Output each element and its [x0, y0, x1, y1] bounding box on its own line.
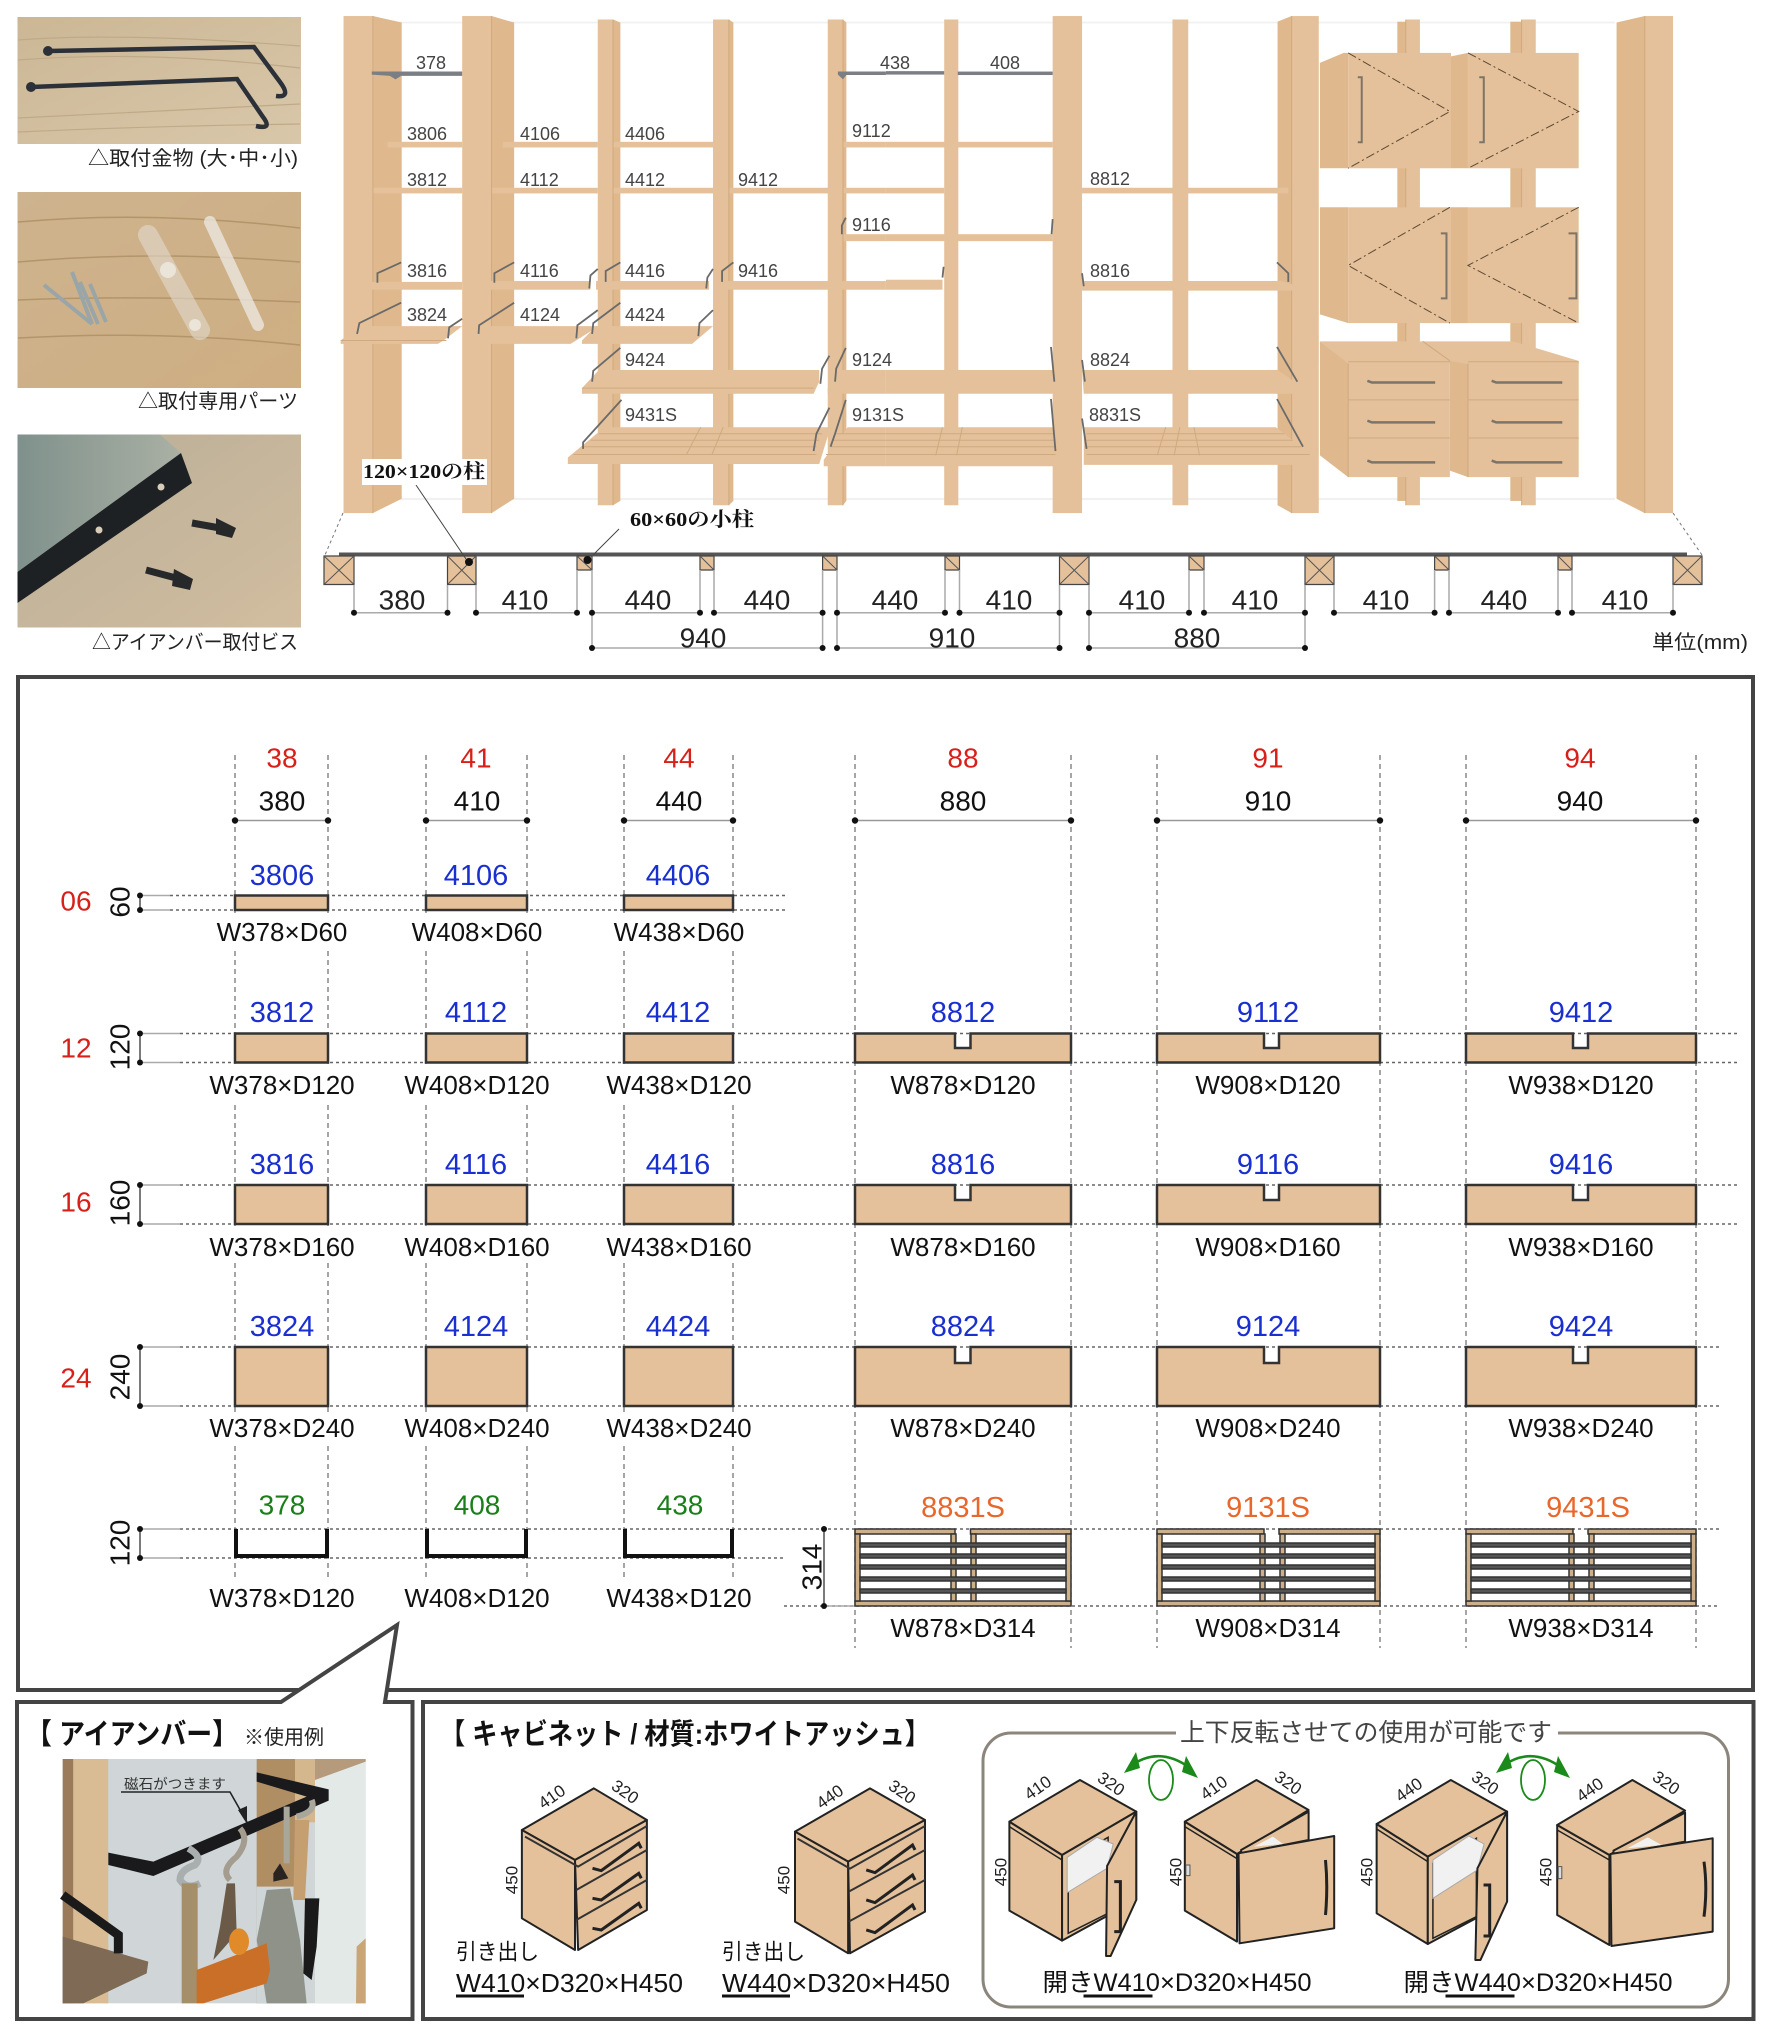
- row: iron bars: 408: [454, 1490, 500, 1520]
- column size headers: 440: [656, 786, 702, 816]
- row: depth 120: W908×D120: [1195, 1070, 1341, 1100]
- column size headers: 410: [454, 786, 500, 816]
- floor plan: rail and posts: [324, 513, 1702, 584]
- drawer caption W410: W410×D320×H450: [456, 1968, 683, 1998]
- hinged cabinet dimensions: 320: [1271, 1767, 1305, 1799]
- post fronts right half: [944, 16, 1673, 513]
- slatted shelf 9431S: 9431S: [1546, 1492, 1630, 1524]
- drawer caption W440: 引き出し: [722, 1940, 805, 1964]
- column size headers: 880: [940, 786, 986, 816]
- shelf code labels: 4412: [625, 170, 665, 190]
- hinged cabinet dimensions: 410: [1197, 1772, 1231, 1804]
- shelf code labels: 9412: [738, 170, 778, 190]
- caption: screws: △アイアンバー取付ビス: [92, 631, 298, 654]
- shelf code labels: 9116: [852, 215, 891, 235]
- shelf elevation: left half: [341, 16, 886, 513]
- shelf code labels: [407, 53, 1141, 425]
- row: depth 160: W908×D160: [1195, 1232, 1341, 1262]
- row: depth 120: 3812: [250, 997, 314, 1029]
- column size headers: 94: [1564, 742, 1596, 774]
- row: depth 60: W408×D60: [412, 917, 542, 947]
- floor plan: dimension lines: 440: [625, 584, 671, 616]
- row: depth 60: 4406: [646, 860, 710, 892]
- row depth headers: [60, 886, 143, 1566]
- post fronts left half: [344, 16, 843, 513]
- shelf code labels: 3816: [407, 261, 447, 281]
- photo: mounting brackets: [18, 17, 301, 144]
- row: depth 160: 9416: [1549, 1149, 1613, 1181]
- shelf code labels: 9112: [852, 121, 891, 141]
- slatted shelf 9431S: W938×D314: [1508, 1613, 1654, 1643]
- shelf elevation: right half: [886, 16, 1673, 513]
- floor plan: dimension lines: 410: [502, 584, 548, 616]
- row: depth 120: 9112: [1237, 997, 1299, 1029]
- row: depth 120: W878×D120: [890, 1070, 1036, 1100]
- caption: mounting parts: △取付専用パーツ: [138, 390, 298, 413]
- photo: dedicated mounting parts: [18, 192, 301, 388]
- row: depth 240: W378×D240: [209, 1413, 355, 1443]
- floor plan: dimension lines: 410: [1119, 584, 1165, 616]
- row: depth 160: 4116: [445, 1149, 507, 1181]
- shelf code labels: 8816: [1090, 261, 1130, 281]
- slatted shelf 9131S: [1157, 1492, 1380, 1643]
- drawer caption W440: [722, 1940, 950, 1998]
- open cabinet W410: [1009, 1780, 1136, 1956]
- hinged cabinet dimensions: 450: [992, 1858, 1010, 1886]
- floor plan: dimension lines: 410: [986, 584, 1032, 616]
- slatted shelf dimension 314: 314: [796, 1544, 828, 1590]
- row: iron bars: W408×D120: [404, 1583, 550, 1613]
- floor plan: dimension lines: 380: [379, 584, 425, 616]
- row: depth 160: W408×D160: [404, 1232, 550, 1262]
- drawer unit dimensions: 410: [535, 1781, 569, 1813]
- open cabinet W440: [1377, 1780, 1507, 1960]
- hinged caption W440: 開きW440×D320×H450: [1404, 1969, 1672, 1997]
- column size headers: 91: [1252, 742, 1284, 774]
- shelf code labels: 4116: [520, 261, 559, 281]
- floor plan: dimension lines: 410: [1602, 584, 1648, 616]
- row: depth 240: W908×D240: [1195, 1413, 1341, 1443]
- row: depth 160: W878×D160: [890, 1232, 1036, 1262]
- shelf code labels: 3806: [407, 124, 447, 144]
- row: depth 60: 3806: [250, 860, 314, 892]
- row: iron bars: [209, 1490, 752, 1613]
- shelf code labels: 4106: [520, 124, 560, 144]
- upper shelves left half: [372, 142, 886, 241]
- shelf code labels: 408: [990, 53, 1020, 73]
- row: depth 240: 4124: [444, 1311, 508, 1343]
- row: depth 240: W878×D240: [890, 1413, 1036, 1443]
- drawer caption W440: W440×D320×H450: [722, 1968, 950, 1998]
- shelf code labels: 9124: [852, 350, 892, 370]
- heading: iron bar: 【 アイアンバー】: [26, 1719, 238, 1751]
- floor plan: dimension lines: 880: [1174, 622, 1220, 654]
- row: depth 120: W378×D120: [209, 1070, 355, 1100]
- row: depth 120: [209, 997, 1696, 1100]
- floor plan: dimension lines: 440: [872, 584, 918, 616]
- row: iron bars: W378×D120: [209, 1583, 355, 1613]
- slatted shelf dimension 314: [796, 1526, 828, 1609]
- slatted shelf 9131S: W908×D314: [1195, 1613, 1341, 1643]
- hinged cabinet dimensions: 450: [1166, 1858, 1186, 1886]
- callout: 120x120 post: [362, 459, 487, 566]
- row: depth 120: W938×D120: [1508, 1070, 1654, 1100]
- row: depth 240: [209, 1311, 1696, 1443]
- column size headers: 910: [1245, 786, 1291, 816]
- hinged cabinet dimensions: 440: [1573, 1774, 1607, 1806]
- iron bars and brackets right half: [886, 71, 1303, 451]
- heading: cabinet material: 【 キャビネット / 材質:ホワイトアッシュ】: [440, 1718, 930, 1751]
- row depth headers: 60: [104, 886, 136, 918]
- note: usage example: ※使用例: [244, 1726, 324, 1749]
- floor plan: dimension lines: 910: [929, 622, 975, 654]
- shelf code labels: 378: [416, 53, 446, 73]
- shelf code labels: 4406: [625, 124, 665, 144]
- row depth headers: 160: [104, 1180, 136, 1226]
- shelf code labels: 9431S: [625, 405, 677, 425]
- row: iron bars: W438×D120: [606, 1583, 752, 1613]
- lower shelves right half: [886, 280, 1313, 466]
- callout: magnets attach: [121, 1776, 247, 1824]
- floor plan: dimension lines: 410: [1363, 584, 1409, 616]
- callout: 60x60 small post: 60×60の小柱: [630, 508, 754, 531]
- shelf code labels: 9416: [738, 261, 778, 281]
- callout: magnets attach: 磁石がつきます: [124, 1776, 226, 1792]
- floor plan: dimension lines: 410: [1232, 584, 1278, 616]
- row: depth 120: 4412: [646, 997, 710, 1029]
- row depth headers: 24: [60, 1362, 92, 1394]
- row: depth 240: 8824: [931, 1311, 995, 1343]
- column size headers: [232, 742, 1699, 824]
- row: depth 160: 4416: [646, 1149, 710, 1181]
- row: depth 240: 9124: [1236, 1311, 1300, 1343]
- slatted shelf 8831S: [855, 1492, 1071, 1643]
- panel: cabinets: [423, 1702, 1754, 2019]
- closed cabinet W440: [1557, 1780, 1713, 1946]
- wall cabinets: [1320, 53, 1579, 323]
- shelf code labels: 438: [880, 53, 910, 73]
- flip arrow right: [1496, 1752, 1570, 1800]
- column size headers: 38: [266, 742, 298, 774]
- row: depth 120: W408×D120: [404, 1070, 550, 1100]
- column size headers: 940: [1557, 786, 1603, 816]
- shelf code labels: 4424: [625, 305, 665, 325]
- hinged cabinet dimensions: 320: [1468, 1767, 1502, 1799]
- drawer unit dimensions: 450: [774, 1866, 794, 1894]
- row depth headers: 12: [60, 1032, 92, 1064]
- row: iron bars: 438: [657, 1490, 703, 1520]
- floor plan: dimension lines: [351, 570, 1676, 654]
- hinged cabinet dimensions: 450: [1358, 1858, 1376, 1886]
- lower shelves left half: [341, 281, 886, 466]
- upper shelves right half: [886, 142, 1288, 241]
- slatted shelf 8831S: 8831S: [921, 1492, 1005, 1524]
- row depth headers: 120: [104, 1024, 136, 1070]
- row: depth 240: 4424: [646, 1311, 710, 1343]
- row: depth 60: W378×D60: [217, 917, 347, 947]
- row: depth 240: W938×D240: [1508, 1413, 1654, 1443]
- shelf code labels: 9424: [625, 350, 665, 370]
- hinged cabinet dimensions: 440: [1392, 1774, 1426, 1806]
- floor plan: dimension lines: 440: [1481, 584, 1527, 616]
- row: depth 120: 4112: [445, 997, 507, 1029]
- row: depth 240: W408×D240: [404, 1413, 550, 1443]
- callout: 60x60 small post: [584, 508, 754, 564]
- row: depth 60: [217, 860, 744, 947]
- row: depth 160: 8816: [931, 1149, 995, 1181]
- post side faces right half: [1278, 16, 1645, 513]
- panel: shelf board size table: [18, 677, 1753, 1690]
- row: depth 160: 3816: [250, 1149, 314, 1181]
- row: depth 60: 4106: [444, 860, 508, 892]
- drawer units: [1320, 341, 1579, 477]
- row depth headers: 240: [104, 1354, 136, 1400]
- floor plan: dimension lines: 440: [744, 584, 790, 616]
- hinged cabinet dimensions: [992, 1767, 1683, 1886]
- shelf code labels: 3824: [407, 305, 447, 325]
- column size headers: 41: [460, 742, 492, 774]
- row: depth 160: W938×D160: [1508, 1232, 1654, 1262]
- shelf code labels: 3812: [407, 170, 447, 190]
- callout: 120x120 post: 120×120の柱: [363, 460, 485, 483]
- hinged cabinet dimensions: 450: [1536, 1858, 1556, 1886]
- shelf code labels: 4112: [520, 170, 559, 190]
- hinged caption W410: 開きW410×D320×H450: [1042, 1969, 1312, 1997]
- row: depth 240: 9424: [1549, 1311, 1613, 1343]
- drawer unit W410: [522, 1788, 647, 1950]
- row: depth 120: W438×D120: [606, 1070, 752, 1100]
- row: depth 160: W378×D160: [209, 1232, 355, 1262]
- shelf code labels: 8831S: [1089, 405, 1141, 425]
- row: iron bars: 378: [259, 1490, 305, 1520]
- drawer unit dimensions: 450: [502, 1866, 522, 1894]
- drawer unit dimensions: 320: [608, 1776, 642, 1808]
- closed cabinet W410: [1185, 1780, 1334, 1943]
- hinged cabinet dimensions: 320: [1649, 1767, 1683, 1799]
- slatted shelf 9131S: 9131S: [1226, 1492, 1310, 1524]
- row: depth 160: [209, 1149, 1696, 1262]
- shelf code labels: 9131S: [852, 405, 904, 425]
- slatted shelf 8831S: W878×D314: [890, 1613, 1036, 1643]
- row depth headers: 16: [60, 1186, 92, 1218]
- floor plan: dimension lines: 940: [680, 622, 726, 654]
- flip arrow left: [1124, 1752, 1198, 1800]
- drawer unit dimensions: [502, 1776, 919, 1894]
- hinged cabinet dimensions: 410: [1021, 1772, 1055, 1804]
- drawer caption W410: 引き出し: [456, 1940, 539, 1964]
- shelf code labels: 4416: [625, 261, 665, 281]
- shelf code labels: 8812: [1090, 169, 1130, 189]
- row: depth 160: 9116: [1237, 1149, 1299, 1181]
- row: depth 120: 9412: [1549, 997, 1613, 1029]
- photo: iron bar screws: [18, 434, 301, 628]
- caption: brackets: △取付金物 (大･中･小): [88, 147, 298, 170]
- row depth headers: 120: [104, 1520, 136, 1566]
- row: depth 160: W438×D160: [606, 1232, 752, 1262]
- drawer unit dimensions: 320: [885, 1776, 919, 1808]
- row: depth 120: 8812: [931, 997, 995, 1029]
- reversible cabinets frame: [983, 1718, 1728, 2007]
- shelf code labels: 8824: [1090, 350, 1130, 370]
- panel: iron bar usage: [17, 1625, 412, 2019]
- slatted shelf 9431S: [1466, 1492, 1696, 1643]
- column size headers: 88: [947, 742, 979, 774]
- iron bars and brackets left half: [357, 72, 886, 451]
- hinged cabinet dimensions: 320: [1094, 1768, 1128, 1800]
- row: depth 60: W438×D60: [614, 917, 744, 947]
- shelf code labels: 4124: [520, 305, 560, 325]
- drawer unit dimensions: 440: [813, 1781, 847, 1813]
- photo: iron bar in use: [63, 1759, 366, 2003]
- post side faces left half: [373, 16, 846, 513]
- unit note: 単位(mm): [1652, 631, 1748, 654]
- reversible cabinets frame: 上下反転させての使用が可能です: [1180, 1719, 1552, 1747]
- column size headers: 380: [259, 786, 305, 816]
- drawer unit W440: [795, 1788, 925, 1953]
- guide lines: [140, 755, 1739, 1648]
- row: depth 240: 3824: [250, 1311, 314, 1343]
- row depth headers: 06: [60, 886, 92, 916]
- column size headers: 44: [663, 742, 695, 774]
- row: depth 240: W438×D240: [606, 1413, 752, 1443]
- drawer caption W410: [456, 1940, 683, 1998]
